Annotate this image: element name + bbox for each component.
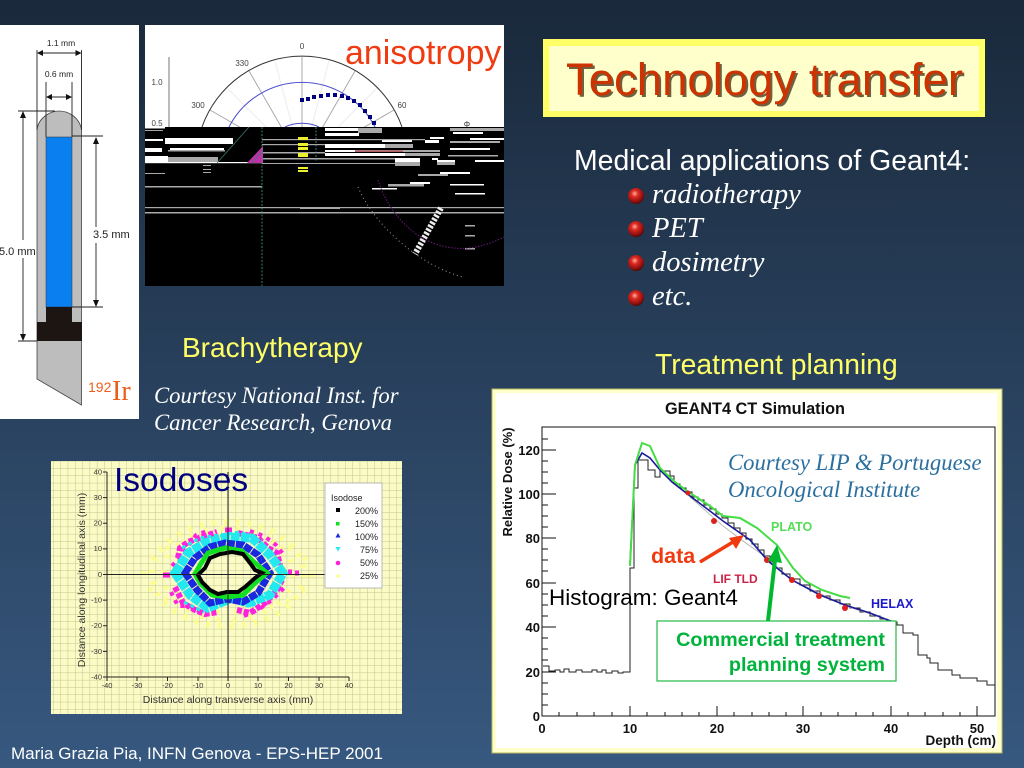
axis titles [76,493,313,706]
anisotropy label: anisotropy [345,34,501,72]
polar chart: 330 [235,59,249,68]
data points [686,490,848,611]
courtesy: LIP: Courtesy LIP & Portuguese [728,450,982,475]
chart frame and ticks [542,427,995,716]
polar chart: Φ [464,120,470,129]
vertical dotted traces [262,127,316,286]
bullet list: etc. [652,281,692,312]
bullet list [628,179,801,312]
axis numbers: 0 [538,721,546,736]
axis tick labels: -20 [91,621,102,630]
dimension labels: 0.6 mm [45,69,73,79]
legend: 150% [355,519,378,529]
panel: CT simulation chart [492,389,1002,753]
heading: medical applications: Medical applications of Geant4: [574,145,970,177]
axis tick labels: -40 [91,672,102,682]
dimension labels [0,38,130,258]
axis tick labels: 0 [98,570,102,579]
polar chart: 1.0 [151,78,163,87]
axis titles: Distance along longitudinal axis (mm) [76,493,88,667]
axis tick labels: 30 [315,681,323,690]
histogram: Geant4 [543,460,995,685]
axis tick labels: -30 [132,681,142,690]
diagonal white stripe [415,208,441,254]
scrambled image area [145,127,504,286]
axis numbers: 100 [518,487,540,502]
bullet list: dosimetry [652,247,765,278]
dimension arrowheads [20,50,99,341]
axis tick labels: -30 [91,647,102,656]
arrow: data [700,535,744,562]
axis tick labels: -40 [102,681,112,690]
axis numbers: Relative Dose (%) [500,427,515,537]
axis tick labels: -10 [193,681,203,690]
axis numbers: 30 [796,721,810,736]
axis numbers: 0 [533,709,540,724]
axis tick labels: -10 [91,596,102,604]
arrow: commercial system [768,545,782,621]
curve: PLATO [630,443,850,598]
yellow marks [298,137,308,172]
scatter: 25% [144,522,312,626]
courtesy: genova: Courtesy National Inst. for [154,383,399,408]
magenta diagonal fragment [247,146,263,163]
scatter: 75% [175,532,283,612]
axis tick labels: 0 [226,681,230,690]
scatter: 100% [185,543,270,603]
axis tick labels: 40 [345,681,353,690]
red line fragment [355,150,403,152]
axis tick labels: -20 [162,681,173,690]
panel: iridium seed diagram [0,25,139,419]
curve: LIF TLD thin reference [690,497,893,621]
legend: 25% [360,571,378,581]
isotope label: Ir [112,376,131,407]
curve labels: LIF TLD [713,572,758,586]
axis numbers: 20 [526,665,540,680]
curve labels [713,520,914,611]
axis numbers: 50 [970,721,984,736]
bullet list: radiotherapy [652,179,801,210]
polar chart [151,42,470,163]
dimension labels: 5.0 mm [0,246,36,258]
panel: anisotropy polar plot [145,25,504,286]
axis tick labels: 20 [94,518,102,528]
callout: commercial planning [657,621,896,681]
polar chart: 0 [300,42,305,51]
data label: data [651,544,696,568]
scatter: 150% [195,548,267,597]
courtesy: genova [154,383,399,435]
axis tick labels: 10 [94,544,102,553]
title shadow: Technology transfer [568,56,965,107]
polar chart: 60 [398,101,407,110]
courtesy: genova: Cancer Research, Genova [154,410,392,435]
dimension labels: 3.5 mm [93,229,130,241]
axis numbers: 40 [526,620,540,635]
dotted arcs [358,187,462,277]
legend: Isodose [331,493,363,503]
callout: commercial planning: planning system [729,654,885,676]
axis numbers: 120 [518,443,540,458]
courtesy: LIP [728,450,982,502]
legend: 75% [360,545,378,555]
axis numbers: Depth (cm) [926,733,996,748]
heading: brachytherapy: Brachytherapy [182,332,363,363]
axis numbers: 40 [884,721,898,736]
legend: 100% [355,532,378,542]
heading: treatment planning: Treatment planning [655,348,898,380]
polar chart: 300 [191,101,205,110]
isotope label [88,376,131,407]
axis numbers: 20 [710,721,724,736]
axis tick labels: 10 [254,681,262,690]
seed capsule [37,111,82,405]
legend: 50% [360,558,378,568]
axis tick labels: 30 [94,493,102,502]
footer credit: Maria Grazia Pia, INFN Genova - EPS-HEP 2001 [11,744,383,763]
title: Technology transfer [566,54,963,105]
scatter: 50% [163,530,299,616]
histogram label: Histogram: Geant4 [549,585,738,610]
scatter: 200% [198,552,262,594]
dimension labels: 1.1 mm [47,38,75,48]
callout: commercial planning: Commercial treatment [676,629,885,651]
isotope label: 192 [88,379,112,395]
courtesy: LIP: Oncological Institute [728,477,920,502]
axis tick labels: 40 [94,468,102,476]
title box [543,39,985,117]
axis titles: Distance along transverse axis (mm) [143,694,313,706]
axis tick labels [91,468,353,690]
bullet list: PET [651,213,705,244]
panel: isodose plot [51,461,402,714]
legend: 200% [355,506,378,516]
chart title: GEANT4 CT Simulation [665,400,845,418]
curve: HELAX [630,453,893,622]
legend [325,483,382,588]
axis numbers: 80 [526,531,540,546]
isodoses label: Isodoses [114,462,248,499]
curve labels: HELAX [871,597,914,611]
polar chart: 0.5 [151,119,163,128]
axis numbers [500,427,996,748]
axis numbers: 60 [526,576,540,591]
curve labels: PLATO [771,520,812,534]
axis numbers: 10 [623,721,637,736]
axes [103,472,349,681]
dimension lines [18,50,103,341]
axis tick labels: 20 [284,681,293,690]
